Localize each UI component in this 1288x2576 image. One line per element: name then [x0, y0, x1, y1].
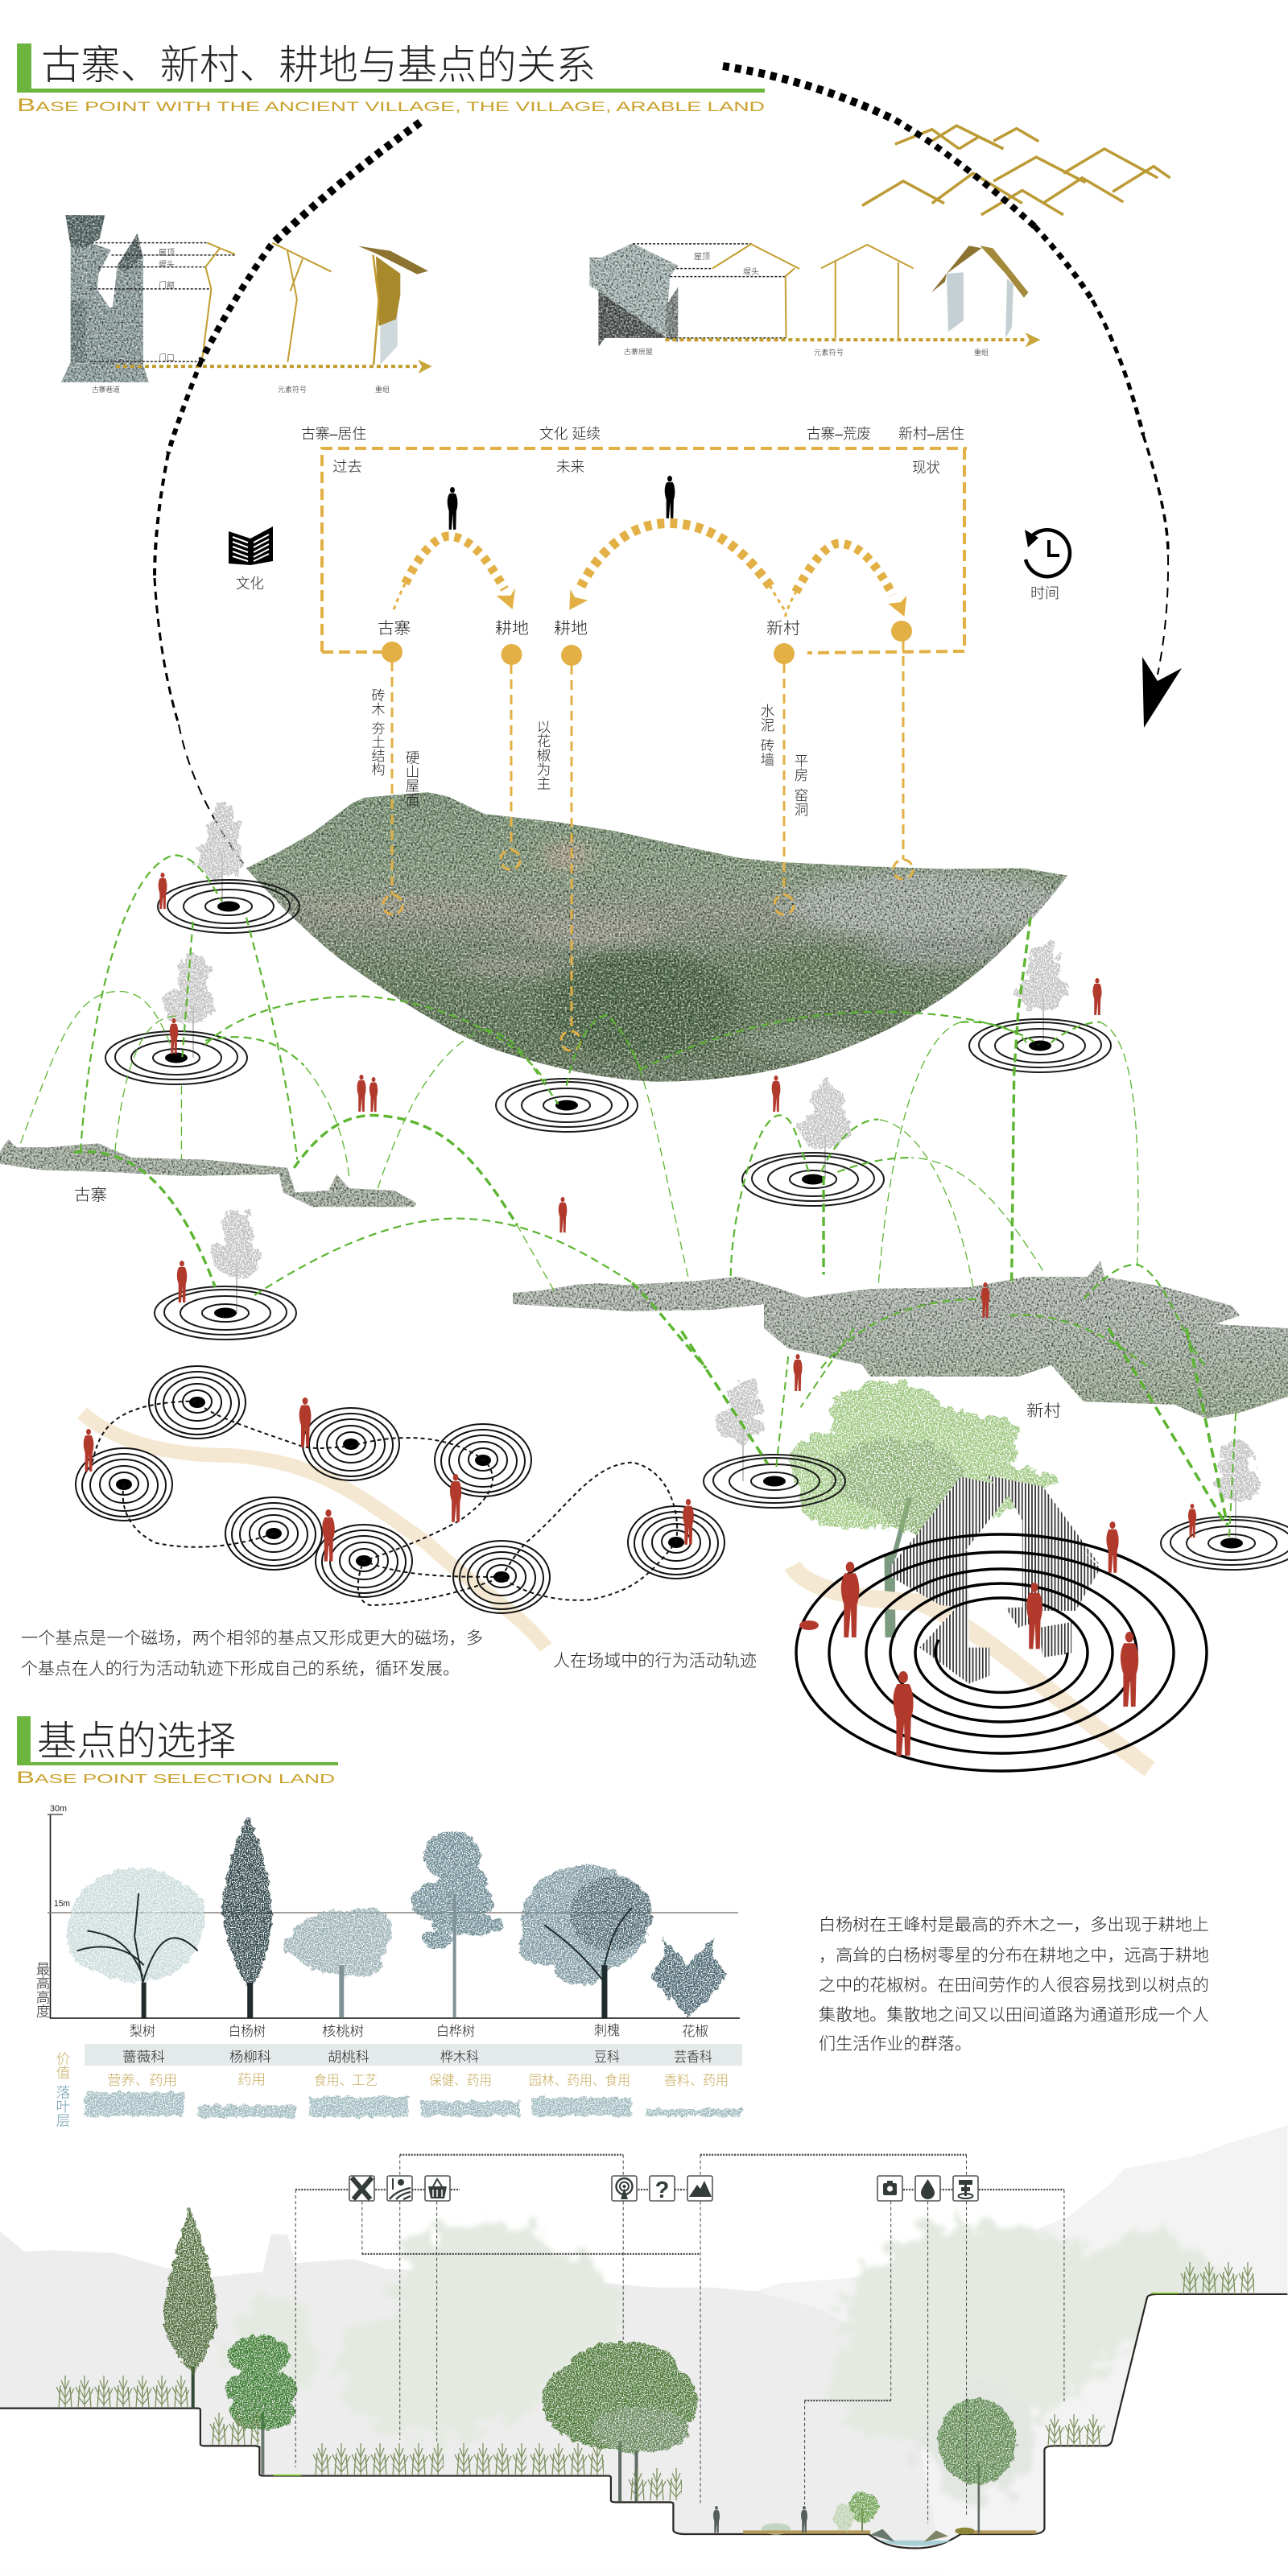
icon: question mark [650, 2176, 675, 2203]
value labels: 营养、药用 [107, 2073, 177, 2088]
magnetic field trail diagram [21, 1366, 757, 1678]
diagram: ancient alley to element symbol to recomposition [61, 215, 432, 394]
icon: mountain [687, 2176, 712, 2201]
labels: 元素符号 [814, 348, 844, 357]
labels [92, 248, 390, 394]
tree name labels: 花椒 [682, 2024, 708, 2039]
value labels: 保健、药用 [429, 2073, 492, 2088]
explanatory text: 一个基点是一个磁场，两个相邻的基点又形成更大的磁场，多 [21, 1629, 483, 1648]
timeline labels: 过去 [332, 459, 362, 475]
timeline labels: 古寨–荒废 [807, 426, 871, 442]
labels: 重组 [974, 349, 989, 357]
english subtitle: B ASE POINT SELECTION LAND [16, 1769, 335, 1787]
vertical material labels: 砖木 夯土结构 [369, 688, 385, 776]
big dashed black arc, right with arrow [723, 66, 1182, 728]
title text: 古寨、新村、耕地与基点的关系 [41, 43, 596, 88]
labels: 墀头 [743, 267, 759, 277]
gray people in the section [713, 2506, 807, 2533]
axes and 15m reference line [47, 1814, 740, 2018]
english subtitle: B ASE POINT WITH THE ANCIENT VILLAGE, THE VILLAGE, ARABLE LAND [17, 95, 765, 115]
icon: signal [612, 2176, 637, 2201]
explanatory text [21, 1629, 757, 1678]
row headers [55, 2051, 71, 2127]
icon: signpost [953, 2176, 978, 2201]
heading: base point selection [16, 1716, 338, 1787]
vertical material labels [369, 688, 809, 816]
stream and rocks [743, 2523, 1036, 2546]
gold dashed arrow [116, 359, 432, 374]
lawn accents [274, 2293, 1179, 2476]
text: poplar description: 白杨树在王峰村是最高的乔木之一，多出现于耕地上 [819, 1916, 1209, 1934]
axis labels: 15m [54, 1899, 70, 1909]
family band: 桦木科 [440, 2050, 479, 2065]
vertical material labels: 以花椒为主 [535, 720, 551, 791]
row headers: 价值 [55, 2051, 71, 2079]
timeline labels: 古寨–居住 [301, 426, 366, 442]
landscape section [0, 2125, 1287, 2576]
icon: time clock: 时间 [1030, 585, 1059, 601]
white ground below the section cut [0, 2294, 1287, 2576]
faded background trees [230, 2220, 1224, 2496]
icon: water drop [915, 2176, 940, 2201]
dashed activity trail [90, 1402, 677, 1605]
timeline labels: 现状 [912, 460, 940, 476]
tree name labels [130, 2023, 708, 2039]
dotted projection lines [633, 244, 786, 338]
foreground trees [163, 2207, 1017, 2530]
axis labels: 30m [50, 1804, 67, 1814]
gold element symbols [201, 243, 332, 365]
beige path [792, 1566, 1150, 1769]
icon: culture book [229, 526, 273, 592]
green dashed connection arcs [21, 855, 1236, 1538]
big green tree [788, 1382, 1059, 1637]
labels: 古寨房屋 [624, 347, 653, 356]
diagram: ancient house to element symbol to recomposition [589, 243, 1040, 357]
tree name labels: 核桃树 [322, 2024, 364, 2039]
timeline labels: 耕地 [554, 619, 588, 638]
timeline labels: 未来 [556, 459, 584, 475]
icon: question mark: ? [655, 2178, 669, 2203]
icon: camera [877, 2176, 902, 2201]
alley photo [61, 215, 149, 382]
tree name labels: 白桦树 [436, 2024, 475, 2039]
family band: 杨柳科 [229, 2050, 271, 2065]
hatched pavilion [891, 1476, 1100, 1684]
litter layer bars [85, 2092, 742, 2118]
tree height comparison chart [35, 1804, 742, 2127]
labels: 墀头 [159, 260, 175, 270]
vertical material labels: 硬山屋面 [404, 750, 420, 807]
labels: 屋顶 [694, 252, 710, 262]
tree silhouettes [67, 1817, 727, 2018]
village name labels [74, 1186, 1061, 1420]
icon: time clock [1025, 530, 1070, 601]
text: poplar description: ，高耸的白杨树零星的分布在耕地之中，远高于耕地 [819, 1946, 1209, 1965]
leader lines [295, 2155, 1064, 2523]
recomposed structure [358, 246, 428, 365]
labels [624, 252, 989, 357]
tree name labels: 梨树 [130, 2024, 155, 2039]
vertical target rings [76, 1366, 724, 1613]
concentric rings [796, 1534, 1207, 1771]
family band [85, 2044, 742, 2066]
timeline labels: 古寨 [378, 619, 411, 638]
family band: 豆科 [594, 2050, 620, 2065]
labels: 元素符号 [278, 385, 307, 394]
icon: road crossing [349, 2176, 374, 2201]
dotted projection lines [90, 243, 235, 361]
hillside panorama photo [238, 791, 1075, 1086]
explanatory text: 个基点在人的行为活动轨迹下形成自己的系统，循环发展。 [21, 1660, 460, 1678]
dashed frame [322, 448, 967, 653]
labels: 屋顶 [159, 248, 175, 258]
value labels: 药用 [237, 2072, 266, 2087]
text: poplar description: 集散地。集散地之间又以田间道路为通道形成一个人 [819, 2006, 1209, 2025]
red human figures [159, 873, 1196, 1538]
gray base point trees [164, 803, 1262, 1543]
timeline labels: 耕地 [495, 619, 529, 638]
red figures on trail [84, 1397, 694, 1562]
axis labels: 最高高度 [35, 1962, 51, 2018]
labels: 重组 [375, 386, 390, 394]
green title bar [17, 43, 765, 93]
tree name labels: 刺槐 [594, 2023, 620, 2038]
value labels: 园林、药用、食用 [529, 2073, 630, 2088]
icon: basket [425, 2176, 450, 2201]
foggy mountain backdrop [0, 2125, 1287, 2576]
icon: farmland [387, 2176, 412, 2201]
labels: 古寨巷道 [92, 385, 120, 394]
village strips [0, 1139, 1288, 1418]
gold house symbols [712, 244, 913, 338]
text: poplar description: 们生活作业的群落。 [819, 2035, 972, 2054]
explanatory text: 人在场域中的行为活动轨迹 [553, 1652, 757, 1670]
text: poplar description [819, 1916, 1209, 2054]
ancient village strip [0, 1139, 416, 1207]
timeline labels: 文化 延续 [539, 426, 601, 442]
dashed gold arcs with arrowheads [394, 523, 906, 617]
value labels: 香料、药用 [664, 2073, 729, 2088]
labels: 门额 [159, 281, 175, 291]
red figures in the pavilion [799, 1521, 1138, 1756]
new village strip [513, 1261, 1288, 1418]
timeline labels: 新村–居住 [898, 426, 964, 442]
family band: 蔷薇科 [122, 2050, 165, 2065]
tree name labels: 白杨树 [229, 2024, 266, 2039]
family band: 芸香科 [674, 2050, 712, 2065]
row headers: 落叶层 [55, 2085, 71, 2127]
family band: 胡桃科 [328, 2050, 369, 2065]
value labels: 食用、工艺 [314, 2073, 378, 2088]
icon row [349, 2176, 978, 2203]
big dashed black arc, left [155, 122, 420, 868]
gold dashed arrow [665, 332, 1040, 347]
text: poplar description: 之中的花椒树。在田间劳作的人很容易找到以树点的 [819, 1976, 1209, 1995]
base point target rings [105, 880, 1288, 1570]
village name labels: 古寨 [74, 1186, 107, 1204]
black human silhouettes [448, 476, 675, 530]
value labels [107, 2072, 729, 2088]
section cut line [0, 2294, 1287, 2549]
labels: 门口 [159, 353, 175, 363]
culture and time timeline diagram [301, 426, 967, 1051]
green title bar [17, 1716, 338, 1765]
vertical material labels: 平房 窑洞 [793, 753, 809, 816]
village name labels: 新村 [1026, 1402, 1061, 1420]
circle nodes and vertical dashed lines [382, 621, 913, 1051]
title: relationship section heading [17, 43, 765, 115]
icon: culture book: 文化 [236, 576, 264, 592]
title text: 基点的选择 [37, 1719, 236, 1764]
gold mountain line motif [862, 126, 1170, 215]
house photo [589, 243, 678, 346]
vertical material labels: 水泥 砖墙 [759, 704, 775, 766]
pavilion with concentric rings [792, 1476, 1207, 1771]
recomposed house [931, 246, 1028, 338]
axis labels [35, 1804, 70, 2018]
tree trunks [193, 2367, 979, 2533]
timeline labels [301, 426, 964, 638]
timeline labels: 新村 [766, 619, 800, 638]
grass clusters [56, 2260, 1254, 2500]
beige path [82, 1413, 546, 1648]
